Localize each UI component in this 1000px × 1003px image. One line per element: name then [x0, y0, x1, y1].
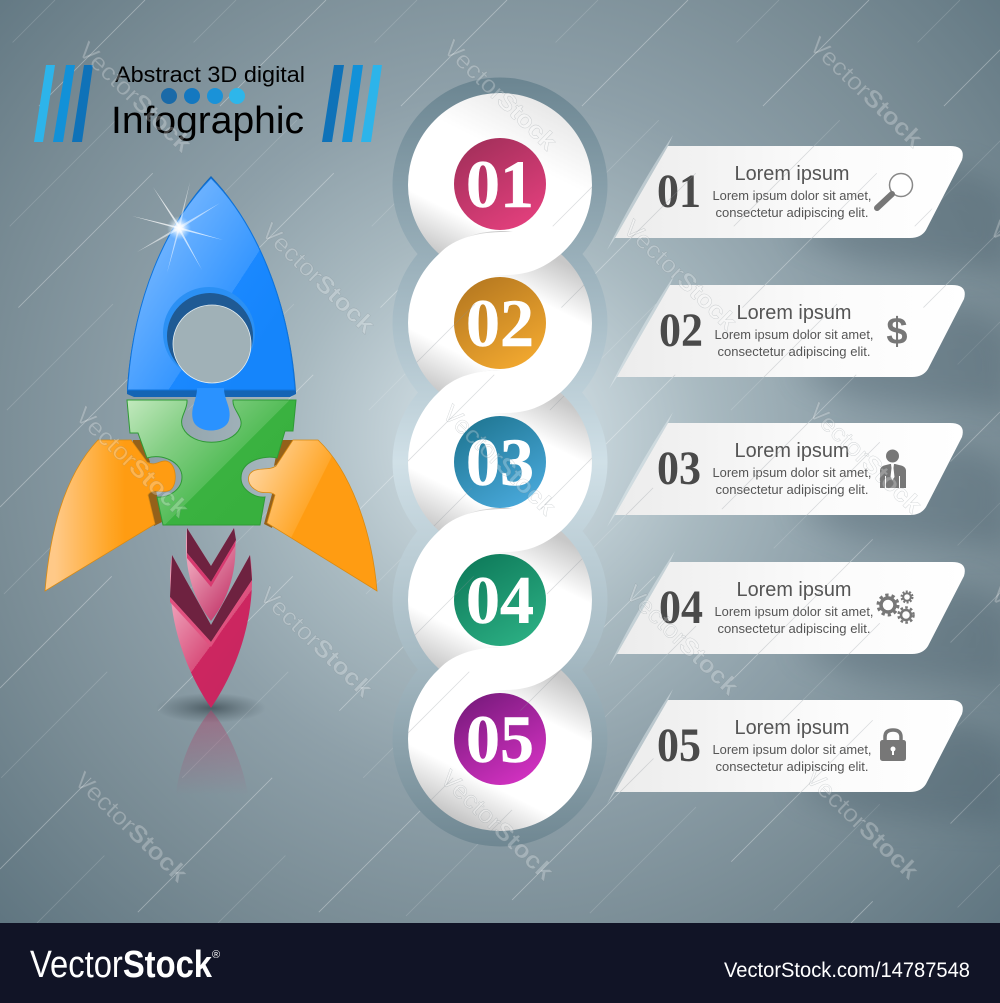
card 02: [609, 274, 1000, 409]
card 03: 03: [657, 442, 701, 495]
green puzzle piece: [127, 400, 296, 525]
swoosh 4-5: [412, 617, 590, 715]
card 02: consectetur adipiscing elit.: [718, 344, 870, 359]
card 03: Lorem ipsum dolor sit amet,: [712, 465, 872, 480]
card 04: 04: [659, 581, 703, 634]
card 03: [607, 412, 1000, 547]
watermarks: VectorStock: [804, 32, 928, 153]
card 05: 05: [657, 719, 701, 772]
card 05: Lorem ipsum dolor sit amet,: [712, 742, 872, 757]
card 02: 02: [659, 304, 703, 357]
watermarks: VectorStock: [618, 215, 742, 336]
footer logo: VectorStock: [30, 944, 213, 986]
watermarks: VectorStock: [254, 582, 378, 703]
footer bar: [0, 923, 1000, 1003]
card 05: [607, 689, 1000, 824]
badge 05: 05: [466, 701, 534, 777]
tower outline: [392, 78, 608, 846]
window porthole: [163, 287, 255, 383]
watermarks: VectorStock: [620, 580, 744, 701]
watermarks: VectorStock: [73, 37, 197, 158]
white discs: [408, 93, 592, 831]
card 04: consectetur adipiscing elit.: [718, 621, 870, 636]
card 01: Lorem ipsum dolor sit amet,: [712, 188, 872, 203]
badge 02: 02: [466, 285, 534, 361]
left orange wing: [45, 440, 175, 591]
badge 01: 01: [466, 146, 534, 222]
rocket illustration: [45, 176, 377, 795]
watermarks: VectorStock: [70, 402, 194, 523]
swoosh 3-4: [412, 479, 590, 577]
icon: gears: [878, 592, 914, 622]
watermarks: VectorStock: [69, 767, 193, 888]
badge 03: [454, 416, 546, 508]
timeline tower: [392, 78, 608, 846]
wing shadows: [133, 440, 293, 528]
card 02: Lorem ipsum: [736, 302, 852, 324]
badge 04: 04: [466, 562, 534, 638]
watermarks: VectorStock: [803, 398, 927, 519]
heading large: Infographic: [111, 100, 304, 142]
heading small: Abstract 3D digital: [115, 62, 305, 87]
watermarks: VectorStock: [437, 400, 561, 521]
watermarks: VectorStock: [800, 764, 924, 885]
card 03: consectetur adipiscing elit.: [716, 482, 868, 497]
watermarks: VectorStock: [256, 218, 380, 339]
right orange wing: [248, 440, 377, 591]
card 04: Lorem ipsum: [736, 579, 852, 601]
card 01: [607, 135, 1000, 270]
watermarks: VectorStock: [438, 35, 562, 156]
swoosh 2-3: [412, 340, 590, 438]
watermarks: VectorStock: [435, 765, 559, 886]
icon: dollar: $: [886, 311, 908, 353]
card 02: Lorem ipsum dolor sit amet,: [714, 327, 874, 342]
badge 03: 03: [466, 424, 534, 500]
sparkle: [132, 182, 223, 273]
card 04: [609, 551, 1000, 686]
card 05: consectetur adipiscing elit.: [716, 759, 868, 774]
header title block: [34, 62, 382, 142]
blue rocket body: [127, 176, 296, 430]
flame reflection: [176, 710, 248, 795]
card 01: 01: [657, 165, 701, 218]
swoosh 1-2: [412, 202, 590, 300]
inner flame: [186, 528, 236, 621]
icon: magnifier: [877, 174, 912, 208]
card 03: Lorem ipsum: [734, 440, 850, 462]
badge 02: [454, 277, 546, 369]
badge 04: [454, 554, 546, 646]
footer url: VectorStock.com/14787548: [724, 959, 970, 982]
outer flame: [170, 555, 252, 708]
registered mark: ®: [212, 949, 220, 961]
icon: padlock: [880, 730, 906, 761]
badge 01: [454, 138, 546, 230]
card 01: Lorem ipsum: [734, 163, 850, 185]
right stripes: [322, 65, 382, 142]
badge 05: [454, 693, 546, 785]
card 04: Lorem ipsum dolor sit amet,: [714, 604, 874, 619]
left stripes: [34, 65, 93, 142]
dots: [161, 88, 245, 104]
card 05: Lorem ipsum: [734, 717, 850, 739]
icon: businessman: [880, 450, 906, 488]
watermarks: [69, 32, 1000, 888]
card 01: consectetur adipiscing elit.: [716, 205, 868, 220]
floor shadow: [156, 693, 266, 723]
